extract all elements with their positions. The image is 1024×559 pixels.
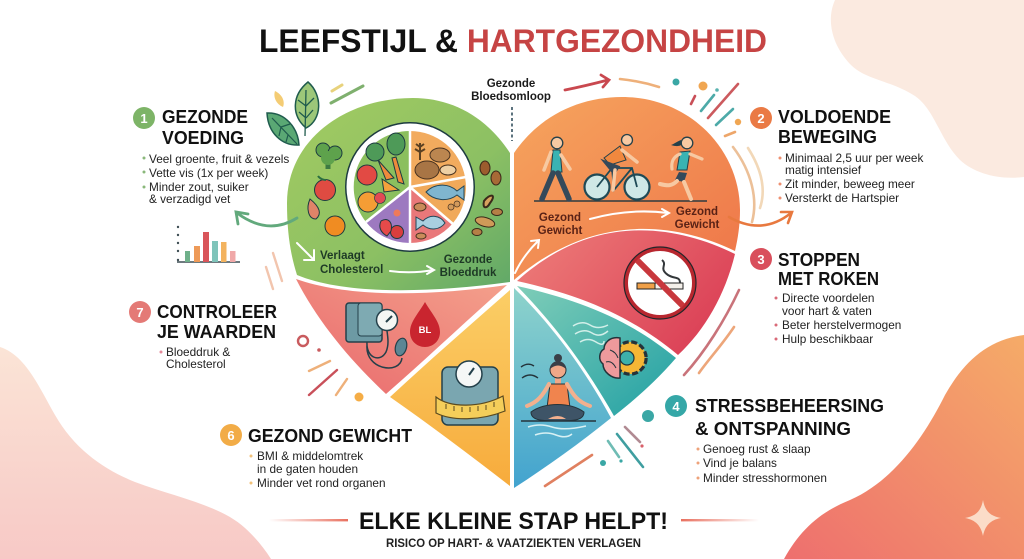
panel: section 4 stressbeheersing: Minder stresshormonen — [703, 471, 827, 485]
waves: teal segment — [573, 323, 608, 344]
panel: section 4 stressbeheersing: & ONTSPANNING — [695, 418, 851, 439]
panel: section 2 voldoende beweging: Minimaal 2,5 uur per week — [785, 151, 923, 165]
label: Gezonde Bloeddruk: Bloeddruk — [440, 267, 497, 279]
panel: section 7 controleer je waarden: Cholesterol — [166, 357, 226, 371]
icon: blood drop: BL — [419, 325, 432, 336]
panel: section 3 stoppen met roken — [750, 248, 901, 346]
icon: bar chart — [177, 226, 240, 262]
label: Verlaagt Cholesterol: Verlaagt — [320, 250, 365, 262]
panel: section 4 stressbeheersing: 4 — [672, 399, 680, 414]
title: LEEFSTIJL & HARTGEZONDHEID — [259, 23, 767, 59]
panel: blue relaxation segment — [514, 288, 611, 488]
ground line — [534, 200, 707, 202]
panel: section 1 gezonde voeding: GEZONDE — [162, 106, 248, 127]
panel: section 7 controleer je waarden: CONTROLEER — [157, 301, 277, 322]
panel: section 1 gezonde voeding: & verzadigd vet — [149, 192, 231, 206]
panel: section 7 controleer je waarden: Bloeddruk & — [166, 345, 230, 359]
panel: section 6 gezond gewicht: GEZOND GEWICHT — [248, 425, 413, 446]
panel: yellow weight segment — [390, 290, 510, 486]
label: Gezonde Bloeddruk: Gezonde — [444, 254, 492, 266]
arrow: circulation — [565, 75, 609, 90]
arrow: between weight labels — [590, 209, 669, 219]
panel: section 6 gezond gewicht: 6 — [227, 428, 235, 443]
label: Gezonde Bloedsomloop: Gezonde — [487, 78, 535, 90]
panel: section 4 stressbeheersing — [665, 395, 884, 485]
runner — [681, 137, 693, 149]
decorative accents: lower right — [545, 290, 739, 486]
panel: section 1 gezonde voeding: Minder zout, suiker — [149, 180, 249, 194]
heart infographic — [287, 97, 740, 488]
vegetables and fruit — [366, 143, 384, 161]
arrow: to cholesterol — [297, 243, 314, 260]
cyclist — [584, 174, 610, 200]
footer slogan: RISICO OP HART- & VAATZIEKTEN VERLAGEN — [386, 538, 641, 550]
decorative accents: upper right — [620, 79, 763, 222]
panel: teal stress segment — [517, 286, 676, 416]
icon: blood pressure monitor — [346, 303, 409, 368]
icon: blood drop — [410, 302, 440, 347]
panel: section 2 voldoende beweging: Zit minder, beweeg meer — [785, 177, 915, 191]
fish on orange — [426, 185, 464, 200]
panel: coral check-up segment — [296, 279, 507, 394]
panel: section 7 controleer je waarden — [129, 301, 277, 371]
decorative accents: lower left — [266, 253, 347, 395]
panel: section 7 controleer je waarden: JE WAARDEN — [157, 321, 276, 342]
label: Gezond Gewicht left: Gezond — [539, 212, 581, 224]
panel: section 3 stoppen met roken: STOPPEN — [778, 249, 860, 270]
panel: section 3 stoppen met roken: 3 — [757, 252, 765, 267]
panel: section 3 stoppen met roken: voor hart & vaten — [782, 304, 872, 318]
footer slogan — [269, 508, 759, 550]
arrow: green to section 1 — [236, 212, 297, 226]
panel: section 1 gezonde voeding: Vette vis (1x per week) — [149, 166, 268, 180]
background blob: bottom left — [0, 347, 271, 559]
label: Verlaagt Cholesterol: Cholesterol — [320, 264, 383, 276]
panel: red smoking segment — [517, 230, 735, 355]
icon: nuts — [472, 161, 502, 236]
grains and nuts — [415, 143, 425, 160]
icon: brain and gear — [600, 338, 646, 378]
arrow: cholesterol to bloeddruk — [390, 266, 434, 274]
dashed line — [511, 107, 513, 141]
panel: section 6 gezond gewicht: in de gaten houden — [257, 462, 358, 476]
icon: no smoking — [624, 247, 696, 319]
label: Gezond Gewicht right: Gewicht — [675, 219, 720, 231]
icon: meditating person — [521, 354, 596, 437]
icon: loose fruit — [308, 143, 345, 236]
panel: orange movement segment — [514, 97, 740, 280]
panel: section 3 stoppen met roken: MET ROKEN — [778, 268, 879, 289]
panel: section 6 gezond gewicht: Minder vet rond organen — [257, 476, 386, 490]
panel: section 2 voldoende beweging: matig intensief — [785, 163, 862, 177]
icon: food plate — [345, 122, 475, 252]
panel: section 1 gezonde voeding: VOEDING — [162, 127, 244, 148]
panel: section 2 voldoende beweging: Versterkt de Hartspier — [785, 191, 899, 205]
fish on red — [416, 216, 445, 230]
panel: section 4 stressbeheersing: Vind je balans — [703, 456, 777, 470]
icon: sparkle star — [965, 500, 1001, 536]
berries on purple — [390, 226, 404, 238]
background blob: top right — [831, 0, 1024, 178]
walker — [551, 137, 563, 149]
panel: section 3 stoppen met roken: Hulp beschikbaar — [782, 332, 873, 346]
decorative accent: top of green — [331, 86, 363, 103]
arrow: center up — [515, 240, 539, 273]
panel: green nutrition segment — [287, 98, 510, 290]
panel: section 2 voldoende beweging: BEWEGING — [778, 126, 877, 147]
panel: section 3 stoppen met roken: Directe voordelen — [782, 291, 874, 305]
panel: section 1 gezonde voeding: Veel groente, fruit & vezels — [149, 152, 289, 166]
arrow: orange to section 2 — [729, 212, 792, 226]
panel: section 1 gezonde voeding: 1 — [140, 111, 148, 126]
footer slogan: ELKE KLEINE STAP HELPT! — [359, 508, 668, 535]
panel: section 2 voldoende beweging: VOLDOENDE — [778, 106, 891, 127]
label: Gezond Gewicht right: Gezond — [676, 206, 718, 218]
label: Gezond Gewicht left: Gewicht — [538, 225, 583, 237]
panel: section 7 controleer je waarden: 7 — [136, 305, 144, 320]
icon: leaves — [267, 82, 319, 145]
icon: walking, cycling, running people — [534, 134, 707, 201]
panel: section 4 stressbeheersing: STRESSBEHEERSING — [695, 395, 884, 416]
panel: section 1 gezonde voeding — [133, 106, 289, 206]
icon: scale with tape — [436, 361, 505, 425]
label: Gezonde Bloedsomloop: Bloedsomloop — [471, 91, 551, 103]
panel: section 6 gezond gewicht: BMI & middelomtrek — [257, 449, 363, 463]
background blob: bottom right — [784, 335, 1024, 559]
panel: section 4 stressbeheersing: Genoeg rust & slaap — [703, 442, 811, 456]
panel: section 3 stoppen met roken: Beter herstelvermogen — [782, 318, 901, 332]
panel: section 6 gezond gewicht — [220, 424, 413, 490]
panel: section 2 voldoende beweging: 2 — [757, 111, 765, 126]
panel: section 2 voldoende beweging — [750, 106, 923, 205]
